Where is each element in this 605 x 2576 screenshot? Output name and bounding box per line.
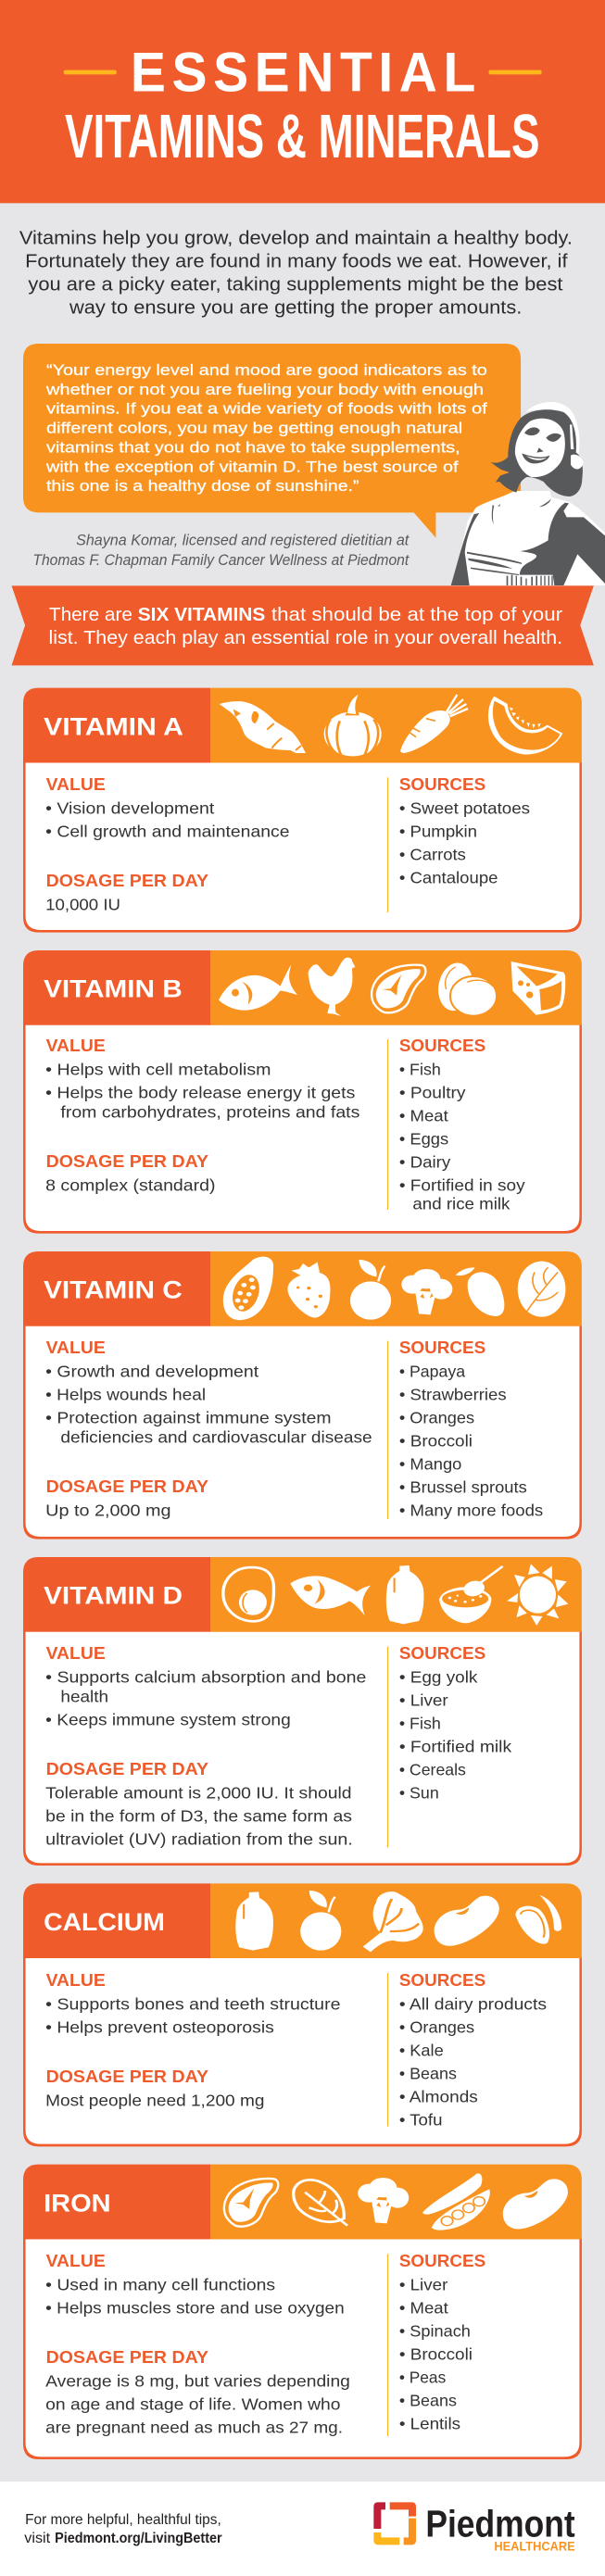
heading: vitamin a: VITAMIN A — [44, 713, 183, 741]
dosage — [45, 2348, 350, 2437]
value list: • Supports calcium absorption and bone — [45, 1668, 366, 1687]
footer band — [0, 2482, 605, 2576]
icon: brussels sprout — [518, 1262, 565, 1317]
icon: bean — [503, 2179, 568, 2229]
dosage: Up to 2,000 mg — [45, 1502, 171, 1520]
quote attribution: Thomas F. Chapman Family Cancer Wellness at Piedmont — [32, 552, 410, 569]
quote speech bubble: “Your energy level and mood are good indicators as to — [46, 362, 487, 379]
sources list: SOURCES — [399, 1971, 485, 1990]
icon: kale — [363, 1891, 423, 1952]
sources list: SOURCES — [399, 2252, 485, 2270]
dosage: are pregnant need as much as 27 mg. — [45, 2419, 343, 2437]
sources list — [399, 1971, 547, 2130]
value list: • Helps muscles store and use oxygen — [45, 2299, 345, 2318]
dosage — [45, 2067, 264, 2110]
sources list: • Mango — [399, 1455, 461, 1474]
quote speech bubble — [23, 344, 521, 538]
quote speech bubble: whether or not you are fueling your body with enough — [45, 382, 484, 398]
value list: from carbohydrates, proteins and fats — [60, 1103, 359, 1122]
panel: vitamin b — [23, 950, 582, 1234]
header banner — [0, 0, 605, 203]
ribbon: six vitamins: that should be at the top of your — [271, 603, 562, 624]
sources list — [399, 1037, 525, 1213]
footer text: visit — [24, 2530, 50, 2546]
value list — [45, 1338, 372, 1447]
sources list: • Egg yolk — [399, 1668, 478, 1687]
sources list: • Beans — [399, 2065, 457, 2083]
logo: piedmont healthcare: HEALTHCARE — [494, 2539, 575, 2553]
value list: • Vision development — [45, 799, 215, 818]
sources list: • Spinach — [399, 2322, 471, 2341]
title: essential: ESSENTIAL — [131, 42, 475, 104]
heading: iron: IRON — [44, 2190, 111, 2218]
sources list: • Fish — [399, 1715, 441, 1733]
sources list: • Sweet potatoes — [399, 799, 530, 818]
ribbon: six vitamins: There are — [49, 603, 132, 624]
icon: milk jug — [235, 1891, 273, 1951]
sources list: • Poultry — [399, 1084, 466, 1102]
dosage: DOSAGE PER DAY — [46, 2067, 208, 2086]
value list: • Helps the body release energy it gets — [45, 1084, 355, 1102]
icon: orange — [350, 1260, 391, 1320]
sources list: • Oranges — [399, 2018, 474, 2037]
panel: iron — [23, 2165, 582, 2459]
icon: mango — [456, 1267, 504, 1316]
quote attribution — [32, 533, 410, 569]
dosage — [45, 1760, 353, 1849]
sources list: • Fortified milk — [399, 1738, 512, 1756]
value list: deficiencies and cardiovascular disease — [60, 1428, 372, 1447]
dosage — [45, 1477, 208, 1520]
sources list: • Peas — [399, 2369, 446, 2387]
ribbon: six vitamins — [12, 585, 594, 665]
dosage: DOSAGE PER DAY — [46, 2348, 208, 2367]
sources list: • Liver — [399, 1691, 448, 1710]
sources list: • Carrots — [399, 846, 466, 864]
sources list: • Eggs — [399, 1130, 448, 1149]
value list: • Supports bones and teeth structure — [45, 1995, 341, 2014]
icon: papaya — [223, 1257, 273, 1320]
sources list: • Sun — [399, 1784, 439, 1803]
dosage: Most people need 1,200 mg — [45, 2092, 264, 2110]
sources list: • Cantaloupe — [399, 869, 498, 887]
icon: fish — [290, 1576, 371, 1615]
footer text: Piedmont.org/LivingBetter — [55, 2530, 222, 2546]
icon: carrot — [400, 695, 468, 753]
icon: broccoli — [401, 1269, 452, 1314]
value list: • Growth and development — [45, 1363, 258, 1381]
sources list: • Brussel sprouts — [399, 1478, 527, 1497]
dosage: DOSAGE PER DAY — [46, 1152, 208, 1171]
dosage: DOSAGE PER DAY — [46, 1760, 208, 1778]
panel: calcium — [23, 1883, 582, 2146]
dosage: Average is 8 mg, but varies depending — [45, 2372, 350, 2391]
portrait: dietitian — [451, 402, 605, 585]
sources list: • Broccoli — [399, 2345, 473, 2364]
sources list: • Kale — [399, 2042, 444, 2060]
dosage: DOSAGE PER DAY — [46, 1477, 208, 1496]
sources list — [399, 2252, 485, 2433]
heading: vitamin d: VITAMIN D — [44, 1583, 183, 1610]
icon: pumpkin — [324, 695, 382, 756]
icons: vitamin b foods — [219, 958, 565, 1016]
quote speech bubble: vitamins. If you eat a wide variety of foods with lots of — [46, 401, 488, 418]
icon: fish — [219, 964, 297, 1011]
value list: health — [60, 1688, 108, 1706]
icons: vitamin a foods — [220, 695, 562, 756]
logo: piedmont healthcare — [373, 2502, 575, 2553]
sources list: • Strawberries — [399, 1386, 507, 1404]
value list: • Helps wounds heal — [45, 1386, 206, 1404]
quote speech bubble: vitamins that you do not have to take supplements, — [46, 439, 460, 457]
icon: cereal bowl — [439, 1567, 502, 1623]
sources list: • Meat — [399, 1107, 448, 1125]
value list — [45, 1971, 341, 2037]
value list — [45, 1037, 359, 1122]
value list: • Helps with cell metabolism — [45, 1061, 271, 1079]
icon: peas — [422, 2173, 490, 2230]
icon: almond — [515, 1895, 561, 1944]
value list: • Keeps immune system strong — [45, 1711, 291, 1729]
value list: • Used in many cell functions — [45, 2276, 275, 2294]
value list: VALUE — [46, 2252, 106, 2270]
quote attribution: Shayna Komar, licensed and registered dietitian at — [76, 533, 410, 549]
sources list — [399, 1644, 512, 1803]
sources list: SOURCES — [399, 1338, 485, 1357]
sources list: • Fortified in soy — [399, 1176, 525, 1195]
heading: vitamin b: VITAMIN B — [44, 976, 183, 1003]
dosage: DOSAGE PER DAY — [46, 872, 208, 890]
intro paragraph — [19, 227, 573, 318]
dosage: 10,000 IU — [45, 896, 120, 914]
icon: bean — [435, 1896, 499, 1946]
sources list: • Liver — [399, 2276, 448, 2294]
heading: vitamin c: VITAMIN C — [44, 1277, 183, 1304]
value list: VALUE — [46, 1644, 106, 1663]
icon: sun — [507, 1564, 568, 1626]
sources list — [399, 1338, 543, 1520]
sources list: • Almonds — [399, 2088, 478, 2106]
sources list: SOURCES — [399, 775, 485, 794]
dosage: 8 complex (standard) — [45, 1176, 216, 1195]
sources list: • Oranges — [399, 1409, 474, 1427]
icon: strawberry — [287, 1263, 330, 1318]
icon: hen — [309, 958, 355, 1016]
value list: VALUE — [46, 1037, 106, 1055]
panel: vitamin c — [23, 1251, 582, 1539]
dosage — [45, 872, 208, 914]
icon: spinach leaf — [294, 2180, 347, 2226]
value list — [45, 2252, 345, 2318]
dosage: ultraviolet (UV) radiation from the sun. — [45, 1830, 353, 1849]
value list: • Protection against immune system — [45, 1409, 332, 1427]
logo: piedmont healthcare: Piedmont — [425, 2502, 575, 2545]
icon: milk jug — [386, 1565, 423, 1624]
sources list: • Pumpkin — [399, 823, 477, 841]
sources list: • Many more foods — [399, 1502, 543, 1520]
quote speech bubble: with the exception of vitamin D. The best source of — [45, 459, 459, 476]
sources list: SOURCES — [399, 1644, 485, 1663]
value list: • Helps prevent osteoporosis — [45, 2018, 274, 2037]
sources list: • Beans — [399, 2392, 457, 2410]
value list — [45, 775, 290, 841]
value list: VALUE — [46, 1338, 106, 1357]
sources list: • Fish — [399, 1061, 441, 1079]
sources list: • Papaya — [399, 1363, 466, 1381]
sources list — [399, 775, 530, 887]
sources list: • Dairy — [399, 1153, 451, 1172]
sources list: • All dairy products — [399, 1995, 547, 2014]
value list: VALUE — [46, 775, 106, 794]
quote speech bubble: different colors, you may be getting enough natural — [46, 420, 462, 437]
icon: cheese — [511, 961, 565, 1015]
panel: vitamin a — [23, 688, 582, 933]
value list: • Cell growth and maintenance — [45, 823, 290, 841]
icon: meat — [224, 2179, 278, 2227]
sources list: • Broccoli — [399, 1432, 473, 1451]
sources list: • Tofu — [399, 2111, 443, 2130]
dosage: on age and stage of life. Women who — [45, 2395, 341, 2414]
footer text — [24, 2511, 222, 2546]
sources list: • Cereals — [399, 1761, 466, 1779]
heading: calcium: CALCIUM — [44, 1909, 165, 1936]
value list: VALUE — [46, 1971, 106, 1990]
icon: fried egg — [223, 1567, 273, 1621]
icon: broccoli — [358, 2178, 409, 2223]
icon: meat — [372, 965, 425, 1012]
sources list: SOURCES — [399, 1037, 485, 1055]
sources list: and rice milk — [412, 1196, 510, 1213]
quote speech bubble: this one is a healthy dose of sunshine.” — [46, 478, 359, 495]
dosage — [45, 1152, 216, 1195]
dosage: Tolerable amount is 2,000 IU. It should — [45, 1784, 352, 1803]
value list — [45, 1644, 366, 1729]
sources list: • Meat — [399, 2299, 448, 2318]
footer text: For more helpful, healthful tips, — [25, 2511, 221, 2528]
icon: eggs — [435, 961, 497, 1016]
icon: logo mark — [373, 2502, 416, 2545]
icon: cantaloupe — [488, 697, 562, 754]
intro paragraph: way to ensure you are getting the proper amounts. — [69, 296, 522, 318]
dosage: be in the form of D3, the same form as — [45, 1807, 352, 1826]
panel: vitamin d — [23, 1557, 582, 1866]
sources list: • Lentils — [399, 2415, 460, 2433]
icon: sweet potato — [220, 701, 306, 753]
icon: orange — [300, 1891, 341, 1951]
ribbon: six vitamins: SIX VITAMINS — [138, 603, 265, 624]
